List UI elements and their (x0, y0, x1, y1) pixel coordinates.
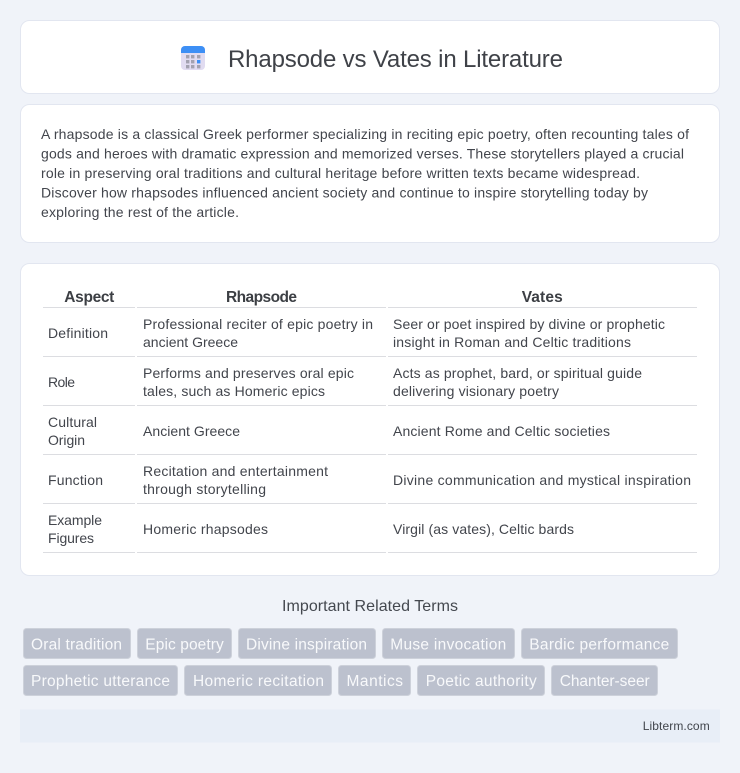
table row: role (43, 365, 697, 406)
table row: definition: Professional reciter of epic poetry in (143, 316, 373, 332)
table row: cultural origin: Ancient Rome and Celtic societies (393, 423, 610, 439)
table row: cultural origin: Cultural (48, 414, 97, 430)
table row: role: delivering visionary poetry (393, 383, 559, 399)
table row: cultural origin: Origin (48, 432, 85, 448)
table row: example figures: Example (48, 512, 102, 528)
table row: cultural origin: Ancient Greece (143, 423, 240, 439)
table row: role: Acts as prophet, bard, or spiritual guide (393, 365, 642, 381)
table header row (43, 289, 697, 308)
tag: bardic performance: Bardic performance (529, 636, 669, 654)
tag: mantics (338, 666, 410, 696)
tag: homeric recitation: Homeric recitation (193, 673, 324, 690)
table row: definition: ancient Greece (143, 334, 238, 350)
tag: prophetic utterance: Prophetic utterance (31, 673, 170, 690)
footer bar (20, 710, 720, 742)
table row: function: Divine communication and mystical inspiration (393, 472, 691, 488)
tag: oral tradition (24, 628, 130, 658)
title: Rhapsode vs Vates in Literature (228, 46, 563, 73)
tag: chanter-seer (552, 666, 658, 696)
text block: introduction: gods and heroes with dramatic expression and memorized verses. These storytellers played a crucial (41, 146, 684, 162)
tag: oral tradition: Oral tradition (31, 636, 122, 654)
table row: cultural origin (43, 414, 697, 454)
text block: introduction: role in preserving oral traditions and cultural heritage before written texts became widespread. (41, 165, 640, 181)
table row: definition: Seer or poet inspired by divine or prophetic (393, 316, 665, 332)
table header row: Rhapsode (226, 289, 297, 306)
table header row: Vates (522, 289, 563, 306)
table row: role: Role (48, 374, 75, 390)
heading: important related terms: Important Related Terms (282, 598, 458, 615)
icon: calendar (181, 46, 205, 70)
tag: divine inspiration: Divine inspiration (246, 636, 367, 654)
text block: introduction: A rhapsode is a classical Greek performer specializing in reciting epic poetry, often recounting tales of (41, 126, 689, 142)
tag: epic poetry (138, 628, 232, 658)
tag: poetic authority: Poetic authority (426, 673, 537, 690)
table row: example figures: Homeric rhapsodes (143, 521, 268, 537)
text block: introduction (41, 126, 689, 220)
panel: header (20, 20, 720, 94)
text block: introduction: exploring the rest of the article. (41, 204, 239, 220)
table header row: Aspect (64, 289, 114, 306)
table row: definition (43, 316, 697, 356)
table row: definition: insight in Roman and Celtic traditions (393, 334, 631, 350)
table row: definition: Definition (48, 325, 108, 341)
table row: function (43, 463, 697, 504)
tag: muse invocation (382, 628, 514, 658)
table row: example figures: Figures (48, 530, 94, 546)
tag: chanter-seer: Chanter-seer (560, 673, 650, 690)
panel: comparison table (20, 264, 720, 576)
tag: mantics: Mantics (346, 673, 403, 690)
panel: introduction (20, 104, 720, 242)
table row: function: through storytelling (143, 481, 266, 497)
tag: bardic performance (522, 628, 678, 658)
panel: related term tags (24, 628, 678, 696)
text block: introduction: Discover how rhapsodes influenced ancient society and continue to inspire storytelling today by (41, 184, 648, 200)
tag: epic poetry: Epic poetry (145, 636, 224, 654)
tag: homeric recitation (184, 666, 332, 696)
tag: muse invocation: Muse invocation (390, 636, 506, 654)
table row: role: tales, such as Homeric epics (143, 383, 325, 399)
table row: function: Function (48, 472, 103, 488)
footer credit: Libterm.com (643, 719, 710, 733)
tag: poetic authority (418, 666, 544, 696)
table row: function: Recitation and entertainment (143, 463, 328, 479)
table row: example figures: Virgil (as vates), Celtic bards (393, 521, 574, 537)
table row: example figures (43, 512, 697, 552)
tag: divine inspiration (238, 628, 376, 658)
tag: prophetic utterance (24, 666, 178, 696)
table row: role: Performs and preserves oral epic (143, 365, 354, 381)
